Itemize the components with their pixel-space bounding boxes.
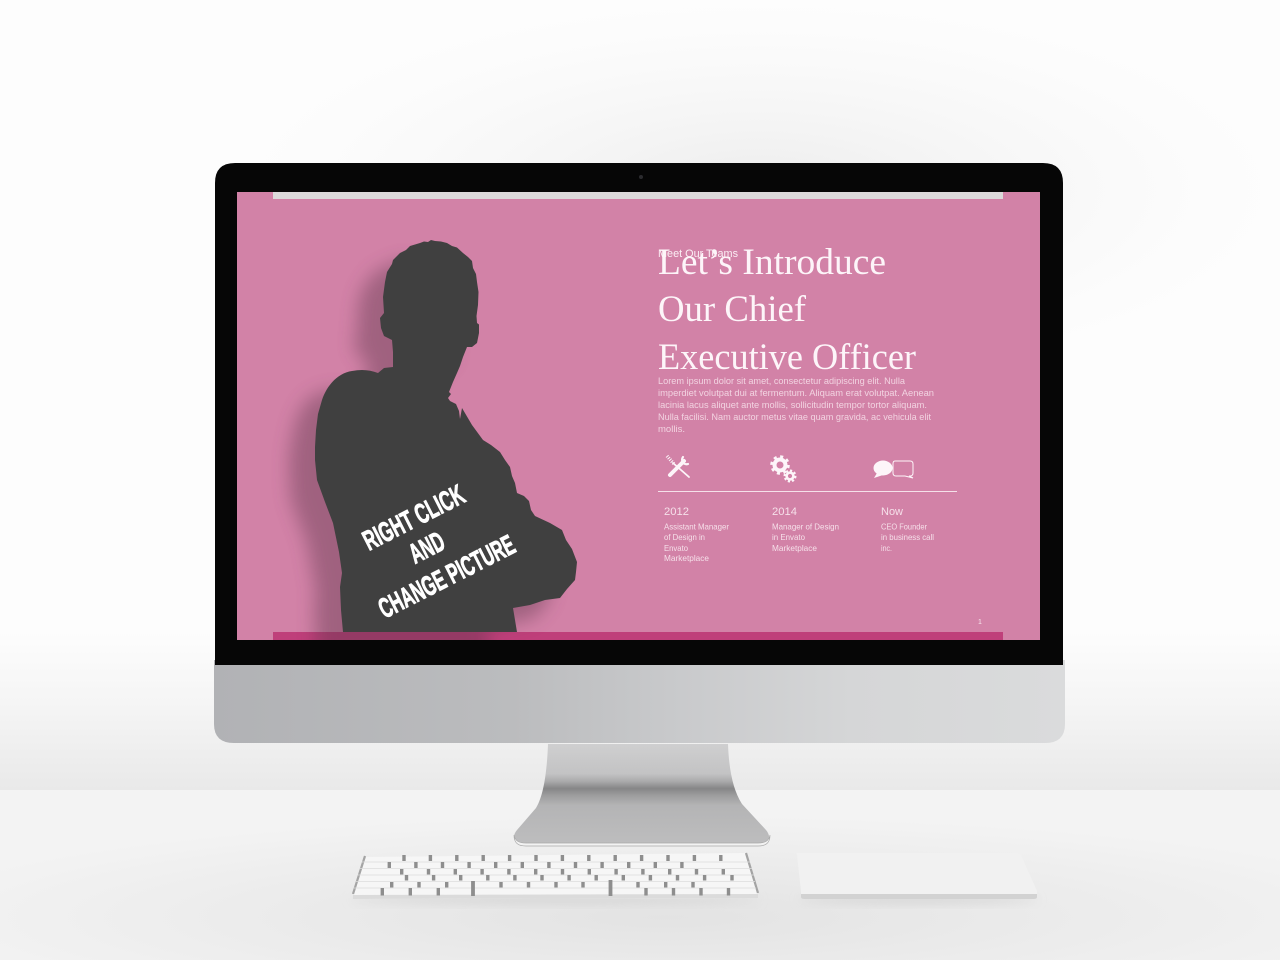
timeline column: now: inc. (881, 543, 892, 553)
bottom bar (273, 632, 1003, 640)
monitor bezel (215, 163, 1063, 665)
timeline column: 2012: Assistant Manager (664, 522, 729, 532)
slide background (237, 192, 1040, 640)
timeline divider (658, 491, 957, 492)
top bar (273, 192, 1003, 199)
body paragraph (658, 376, 934, 435)
timeline column: 2014: 2014 (772, 506, 797, 518)
title (658, 242, 916, 378)
body paragraph: mollis. (658, 424, 685, 435)
title: Our Chief (658, 289, 807, 330)
timeline column: 2014: Marketplace (772, 543, 817, 553)
silhouette shadow (289, 260, 551, 660)
timeline column: 2012: Marketplace (664, 553, 709, 563)
webcam (639, 175, 643, 179)
keyboard (350, 853, 760, 903)
desk surface (0, 790, 1280, 960)
timeline column: 2012: 2012 (664, 506, 689, 518)
title: Let’s Introduce (658, 242, 886, 283)
monitor (214, 163, 1065, 743)
icon: chat bubbles (874, 460, 913, 478)
timeline column: now (881, 506, 934, 553)
portrait silhouette placeholder (315, 240, 577, 632)
timeline column: 2012: Envato (664, 543, 688, 553)
timeline column: 2014: in Envato (772, 532, 805, 542)
body paragraph: Lorem ipsum dolor sit amet, consectetur adipiscing elit. Nulla (658, 376, 906, 387)
slide screen (237, 192, 1040, 660)
body paragraph: imperdiet volutpat dui at fermentum. Aliquam erat volutpat. Aenean (658, 388, 934, 399)
monitor stand (514, 744, 770, 846)
icon: tools (667, 456, 689, 477)
timeline column: 2012 (664, 506, 729, 563)
title: Executive Officer (658, 337, 916, 378)
page number: 1 (978, 619, 982, 626)
timeline column: now: Now (881, 506, 903, 518)
timeline column: now: in business call (881, 532, 934, 542)
body paragraph: Nulla facilisi. Nam auctor metus vitae quam gravida, ac vehicula elit (658, 412, 931, 423)
change picture label (358, 479, 520, 624)
timeline column: 2014: Manager of Design (772, 522, 839, 532)
body paragraph: lacinia lacus aliquet ante mollis, sollicitudin tempor tortor aliquam. (658, 400, 927, 411)
change picture label: CHANGE PICTURE (373, 529, 520, 624)
monitor chin (214, 660, 1065, 743)
change picture label: RIGHT CLICK (358, 479, 470, 556)
timeline column: now: CEO Founder (881, 522, 927, 532)
change picture label: AND (404, 526, 450, 570)
section label: Meet Our Teams (658, 248, 738, 260)
timeline column: 2012: of Design in (664, 532, 705, 542)
timeline column: 2014 (772, 506, 839, 553)
icon: gears (772, 457, 795, 481)
trackpad (796, 853, 1038, 903)
